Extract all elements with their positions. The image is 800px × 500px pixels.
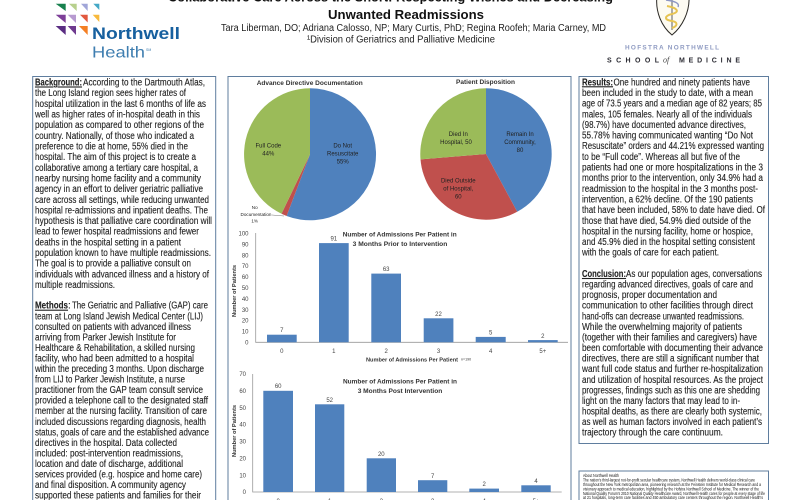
bar chart: admissions prior to intervention: 30 [242, 308, 249, 314]
bar chart: admissions prior to intervention: 70 [242, 264, 249, 270]
text block: methods: within the preceding 3 months. Upon discharge [34, 364, 204, 375]
text block: results: with the goals of care for each patient. [581, 248, 719, 259]
text block: methods: practitioner from the GAP team consult service [35, 385, 203, 396]
pie chart: patient disposition: Died In [449, 132, 468, 138]
panel: charts [228, 76, 571, 500]
panel: results and conclusion [579, 76, 768, 444]
text block: conclusion: been comfortable with documenting their advance [582, 343, 763, 354]
logo: Hofstra Northwell School of Medicine: of [663, 56, 671, 64]
text block: results: Results: [582, 77, 613, 88]
bar chart: admissions prior to intervention: 5+ [539, 349, 547, 355]
bar chart: admissions prior to intervention: 3 Months Prior to Intervention [353, 241, 447, 248]
text block: conclusion [581, 269, 763, 439]
bar chart: admissions prior to intervention: 7 [280, 328, 284, 334]
text block: conclusion: regarding advanced directives, goals of care and [582, 280, 753, 291]
text block: methods: consulted on patients with advanced illness [35, 322, 191, 333]
text block: conclusion: prognosis, proper documentation and [582, 290, 717, 301]
text block: conclusion: directives, there are still a significant number that [582, 354, 759, 365]
text block: conclusion: While the overwhelming majority of patients [582, 322, 742, 333]
bar chart: admissions post intervention: 10 [239, 473, 247, 479]
text block: background: individuals with advanced illness and a history of [35, 269, 209, 280]
pie chart: patient disposition: Remain In [506, 132, 534, 138]
pie chart: patient disposition: 80 [517, 148, 524, 154]
text block: methods: arriving from Parker Jewish Institute for [35, 332, 177, 343]
pie chart: patient disposition: Hospital, 50 [440, 140, 473, 146]
text block: results: One hundred and ninety patients have [614, 77, 750, 88]
bar chart: admissions prior to intervention: Number of Patients [232, 265, 238, 317]
bar chart: admissions post intervention [232, 372, 562, 500]
text block: results [581, 77, 765, 259]
text block: background: country. Nationally, of those who indicated a [35, 131, 194, 142]
authors and affiliation: ¹Division of Geriatrics and Palliative Medicine [307, 35, 495, 46]
text block: conclusion: want full code status and further re-hospitalization [581, 364, 763, 375]
text block: methods: and final disposition. A community agency [35, 480, 186, 491]
bar chart: admissions post intervention: 3 Months Post Intervention [358, 388, 442, 395]
text block: results: 55.78% having communicated wanting “Do Not [582, 131, 753, 142]
text block: methods: from LIJ to Parker Jewish Institute, a nurse [35, 375, 185, 386]
text block: results: months prior to the intervention, only 34.9% had a [582, 173, 763, 184]
panel: about Northwell Health: visionary approach to medical education, highlighted by the Hofstra Northwell School of Medicine. The winner of the [583, 487, 759, 492]
text block: background: nearby nursing home facility and a community [35, 173, 201, 184]
text block: background: multiple readmissions. [35, 280, 115, 291]
pie chart: advance directive documentation: Resuscitate [327, 152, 359, 158]
text block: background: collaborative among a tertiary care hospital, a [35, 163, 198, 174]
pie chart: patient disposition: Patient Disposition [456, 79, 515, 86]
pie chart: advance directive documentation: Documentation [241, 212, 272, 217]
bar chart: admissions prior to intervention: 2 [385, 349, 389, 355]
pie chart: patient disposition: Community, [504, 140, 536, 146]
text block: methods: status, goals of care and the established advance [35, 427, 209, 438]
text block: background: the Long Island region sees higher rates of [35, 88, 186, 99]
text block: results: to be “Full code”. Whereas all but five of the [582, 152, 740, 163]
title: Unwanted Readmissions [328, 7, 484, 22]
pie chart: advance directive documentation: No [252, 205, 258, 210]
bar chart: admissions prior to intervention: 90 [242, 242, 249, 248]
text block: methods: Healthcare & Rehabilitation, a skilled nursing [35, 343, 195, 354]
text block: background: population known to have multiple readmissions. [35, 248, 211, 259]
text block: results: males, 105 females. Nearly all of the individuals [582, 109, 752, 120]
bar chart: admissions prior to intervention: 5 [489, 330, 493, 336]
bar chart: admissions prior to intervention: 22 [435, 312, 442, 318]
pie chart: patient disposition: of Hospital, [443, 186, 474, 192]
logo: Hofstra Northwell School of Medicine: MEDICINE [679, 58, 740, 64]
text block: conclusion: (together with their families and caregivers) have [582, 332, 757, 344]
bar chart: admissions prior to intervention: Number of Admissions Per Patient [366, 358, 458, 364]
pie chart: patient disposition [420, 79, 552, 220]
text block: conclusion: Conclusion: [582, 269, 626, 280]
panel: about Northwell Health: The nation's third-largest not-for-profit secular healthcare system, Northwell Health delivers world-class clinical care [583, 477, 755, 482]
text block: methods: location and date of discharge, additional [35, 459, 183, 470]
text block: background: care across all settings, while reducing unwanted [35, 195, 209, 206]
text block: methods: Methods [35, 301, 68, 312]
bar chart: admissions post intervention: 20 [239, 456, 247, 462]
text block: methods: member at the nursing facility. Transition of care [35, 406, 207, 417]
text block: background: hospital re-admissions and inpatient deaths. The [35, 205, 208, 216]
text block: methods: The Geriatric and Palliative (GAP) care [72, 301, 208, 312]
logo: Northwell Health: Northwell [92, 24, 180, 43]
text block: conclusion: light on the many factors that may lead to in- [582, 396, 740, 407]
bar chart: admissions prior to intervention: 100 [238, 232, 249, 238]
text block: results: intervention, a 62% decline. Of the 190 patients [582, 194, 753, 206]
text block: methods: : [68, 301, 71, 312]
text block: conclusion: and utilization of hospital resources. As the project [582, 375, 763, 386]
bar chart: admissions post intervention: 0 [243, 490, 247, 496]
bar chart: admissions prior to intervention: 1 [332, 349, 336, 355]
bar chart: admissions post intervention: 50 [239, 406, 247, 412]
text block: background: hospital. The aim of this project is to create a [35, 152, 196, 163]
bar chart: admissions prior to intervention: 0 [245, 340, 249, 346]
bar chart: admissions prior to intervention: 10 [242, 330, 249, 336]
text block: results: and 45.9% died in the hospital setting consistent [582, 237, 755, 248]
bar chart: admissions prior to intervention: 40 [242, 297, 249, 303]
text block: conclusion: communication to other facilities through direct [582, 301, 753, 312]
bar chart: admissions post intervention: 40 [239, 423, 247, 429]
panel: about Northwell Health: throughout the New York metropolitan area, pioneering research at the Feinstein Institute for Medical Research and a [583, 482, 761, 487]
logo: Northwell Health [56, 4, 180, 61]
logo: Hofstra Northwell School of Medicine: SCHOOL [607, 58, 660, 64]
pie chart: advance directive documentation: 55% [337, 160, 349, 166]
bar chart: admissions post intervention: Number of Patients [232, 405, 238, 457]
pie chart: patient disposition: 60 [455, 194, 462, 200]
bar chart: admissions prior to intervention [232, 232, 568, 364]
text block: results: (98.7%) have documented advance directives, [582, 120, 746, 131]
text block: background: preference to die at home, 55% died in the [35, 142, 188, 152]
logo: Northwell Health: SM [146, 48, 151, 52]
text block: methods: included: post-intervention readmissions, [35, 448, 183, 459]
bar chart: admissions prior to intervention: 80 [242, 253, 249, 259]
pie chart: advance directive documentation: Full Code [255, 144, 282, 150]
pie chart: advance directive documentation: Do Not [333, 144, 352, 150]
pie chart: advance directive documentation: 44% [262, 152, 275, 158]
text block: conclusion: as well as human factors involved in each patient’s [582, 417, 762, 428]
bar chart: admissions post intervention: 60 [275, 384, 282, 390]
text block: results: hospital in the nursing facility, home or hospice, [582, 226, 753, 237]
text block: methods: team at Long Island Jewish Medical Center (LIJ) [35, 311, 203, 322]
pie chart: advance directive documentation: 1% [251, 218, 258, 224]
bar chart: admissions prior to intervention: 50 [242, 286, 249, 292]
logo: Hofstra Northwell School of Medicine: HOFSTRA NORTHWELL [625, 44, 719, 52]
text block: background: population as compared to other regions of the [35, 120, 204, 131]
pie chart: patient disposition: Died Outside [441, 178, 476, 184]
bar chart: admissions post intervention: 2 [483, 482, 487, 488]
bar chart: admissions prior to intervention: Number of Admissions Per Patient in [343, 232, 457, 238]
authors and affiliation: Tara Liberman, DO; Adriana Calosso, NP; Mary Curtis, PhD; Regina Roofeh; Maria Carney, MD [221, 23, 606, 34]
text block: conclusion: As our population ages, conversations [626, 269, 762, 280]
text block: background: Background: [35, 78, 82, 88]
title [168, 0, 613, 22]
bar chart: admissions prior to intervention: 20 [242, 319, 249, 325]
text block: background: hospital utilization in the last 6 months of life as [35, 99, 206, 110]
pie chart: advance directive documentation: Advance Directive Documentation [257, 80, 363, 87]
text block: methods [34, 301, 209, 500]
bar chart: admissions prior to intervention: 2 [541, 334, 545, 340]
panel: about Northwell Health: About Northwell Health [583, 473, 619, 478]
text block: methods: directives in the hospital. Data collected [35, 438, 177, 449]
bar chart: admissions prior to intervention: 60 [242, 275, 249, 281]
bar chart: admissions post intervention: 30 [239, 440, 247, 446]
logo: Hofstra Northwell School of Medicine [607, 0, 740, 64]
text block: results: those that have died, 54.9% died outside of the [582, 216, 751, 227]
pie chart: advance directive documentation [241, 80, 376, 224]
text block: methods: services provided (e.g. hospice and home care) [35, 470, 202, 480]
logo: Northwell Health: Health [92, 44, 145, 62]
bar chart: admissions post intervention: 60 [239, 389, 247, 395]
text block: methods: included discussions regarding diagnosis, health [35, 417, 206, 428]
text block: conclusion: hospital deaths, as there are clearly both systemic, [582, 406, 762, 418]
text block: methods: provided a telephone call to the designated staff [35, 396, 208, 407]
bar chart: admissions post intervention: 20 [378, 452, 385, 458]
bar chart: admissions post intervention: 70 [239, 372, 247, 378]
bar chart: admissions post intervention: 52 [326, 398, 334, 404]
bar chart: admissions post intervention: Number of Admissions Per Patient in [343, 378, 457, 386]
text block: background: lead to fewer hospital readmissions and fewer [35, 227, 200, 238]
text block: methods: facility, who had been admitted to a hospital [35, 354, 194, 364]
text block: results: patients had one or more hospitalizations in the 3 [582, 162, 763, 174]
bar chart: admissions prior to intervention: 4 [489, 349, 493, 355]
text block: background: hypothesis is that palliative care coordination will [35, 216, 212, 227]
bar chart: admissions prior to intervention: 91 [330, 236, 338, 242]
bar chart: admissions prior to intervention: n=190 [461, 358, 471, 362]
text block: background: deaths in the hospital setting in a patient [35, 237, 181, 248]
bar chart: admissions prior to intervention: 63 [383, 267, 390, 273]
text block: results: been included in the study to date, with a mean [582, 88, 753, 99]
bar chart: admissions post intervention: 7 [431, 474, 435, 480]
panel: background and methods [33, 76, 216, 500]
text block: results: readmission to the hospital in the 3 months post- [582, 184, 758, 195]
panel: about Northwell Health [579, 471, 768, 500]
bar chart: admissions prior to intervention: 0 [280, 349, 284, 355]
text block: conclusion: trajectory through the care continuum. [582, 428, 723, 439]
bar chart: admissions post intervention: 4 [534, 479, 538, 485]
bar chart: admissions prior to intervention: 3 [437, 349, 441, 355]
text block: background [34, 78, 212, 291]
text block: background: agency in an effort to deliver geriatric palliative [35, 184, 203, 195]
text block: conclusion: hand-offs can decrease unwanted readmissions. [582, 311, 744, 322]
authors and affiliation [221, 23, 606, 46]
text block: background: The goal is to provide a palliative consult on [35, 259, 191, 270]
text block: background: According to the Dartmouth Atlas, [83, 78, 205, 88]
text block: background: well as higher rates of in-hospital death in this [34, 110, 200, 120]
